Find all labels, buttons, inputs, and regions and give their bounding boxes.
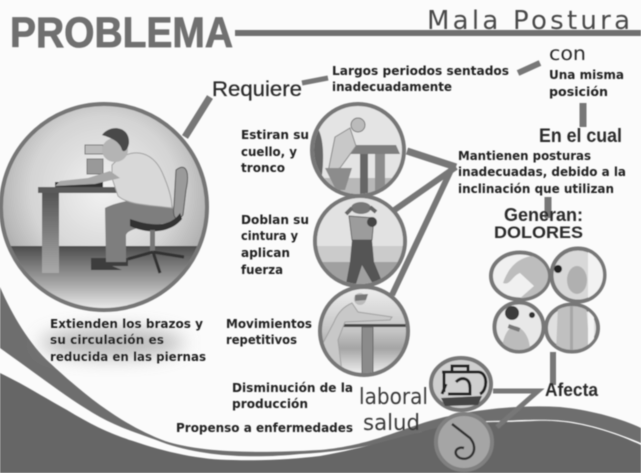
- text: Extienden los brazos: reducida en las piernas: [50, 349, 206, 364]
- title rule: [235, 30, 641, 36]
- label: laboral: laboral: [359, 385, 428, 410]
- illustration: stretching neck at desk: [312, 104, 404, 202]
- label: Requiere: Requiere: [212, 78, 302, 101]
- text: Extienden los brazos: su circulación es: [50, 332, 164, 347]
- pain icon: lower back: [546, 304, 598, 352]
- text: Doblan su cintura: fuerza: [241, 262, 283, 277]
- connectors: [185, 63, 583, 427]
- text: Una misma posicion: posición: [549, 84, 608, 99]
- text: Una misma posicion: Una misma: [549, 67, 624, 82]
- background waves: [0, 287, 641, 473]
- illustration: bending and lifting: [315, 196, 407, 288]
- text: Movimientos repetitivos: repetitivos: [226, 332, 297, 347]
- text: Estiran su cuello: Estiran su: [241, 127, 309, 142]
- text: Disminucion de la produccion: Disminución de la: [232, 380, 353, 395]
- label: Afecta: Afecta: [545, 380, 599, 400]
- pain icon: neck: [494, 302, 544, 352]
- text: Movimientos repetitivos: Movimientos: [226, 316, 312, 331]
- text: Extienden los brazos: Extienden los brazos y: [50, 316, 203, 331]
- pain icon: upper back: [552, 248, 606, 302]
- text: Mantienen posturas: inadecuadas, debido a la: [458, 164, 626, 179]
- label: En el cual: En el cual: [539, 126, 622, 147]
- label: con: con: [549, 43, 586, 65]
- text: Doblan su cintura: aplican: [241, 245, 290, 260]
- main illustration: seated person at desk: [0, 104, 210, 310]
- text: Mantienen posturas: inclinación que utilizan: [458, 181, 614, 196]
- text: Doblan su cintura: cintura y: [241, 228, 298, 243]
- label: salud: salud: [363, 411, 420, 436]
- text: Doblan su cintura: Doblan su: [241, 212, 309, 227]
- text: Disminucion de la produccion: producción: [232, 396, 308, 411]
- title: PROBLEMA: PROBLEMA: [10, 9, 233, 57]
- text: Largos periodos: Largos periodos sentados: [332, 63, 509, 78]
- subtitle: Mala Postura: Mala Postura: [427, 6, 630, 36]
- text: Propenso a enfermedades: Propenso a enfermedades: [176, 420, 353, 435]
- text: Largos periodos: inadecuadamente: [332, 79, 452, 94]
- icon: medical tube: [436, 414, 492, 470]
- pain icon: shoulder: [491, 252, 550, 300]
- text: Mantienen posturas: Mantienen posturas: [458, 148, 591, 163]
- text: Estiran su cuello: cuello, y: [241, 144, 297, 159]
- illustration: repetitive movements at table: [320, 287, 410, 375]
- icon: sewing machine: [431, 358, 491, 410]
- label: Generan: Generan:: [504, 205, 583, 225]
- label: DOLORES: DOLORES: [494, 223, 583, 242]
- text shadow smudge: [40, 328, 184, 358]
- text: Estiran su cuello: tronco: [241, 160, 285, 175]
